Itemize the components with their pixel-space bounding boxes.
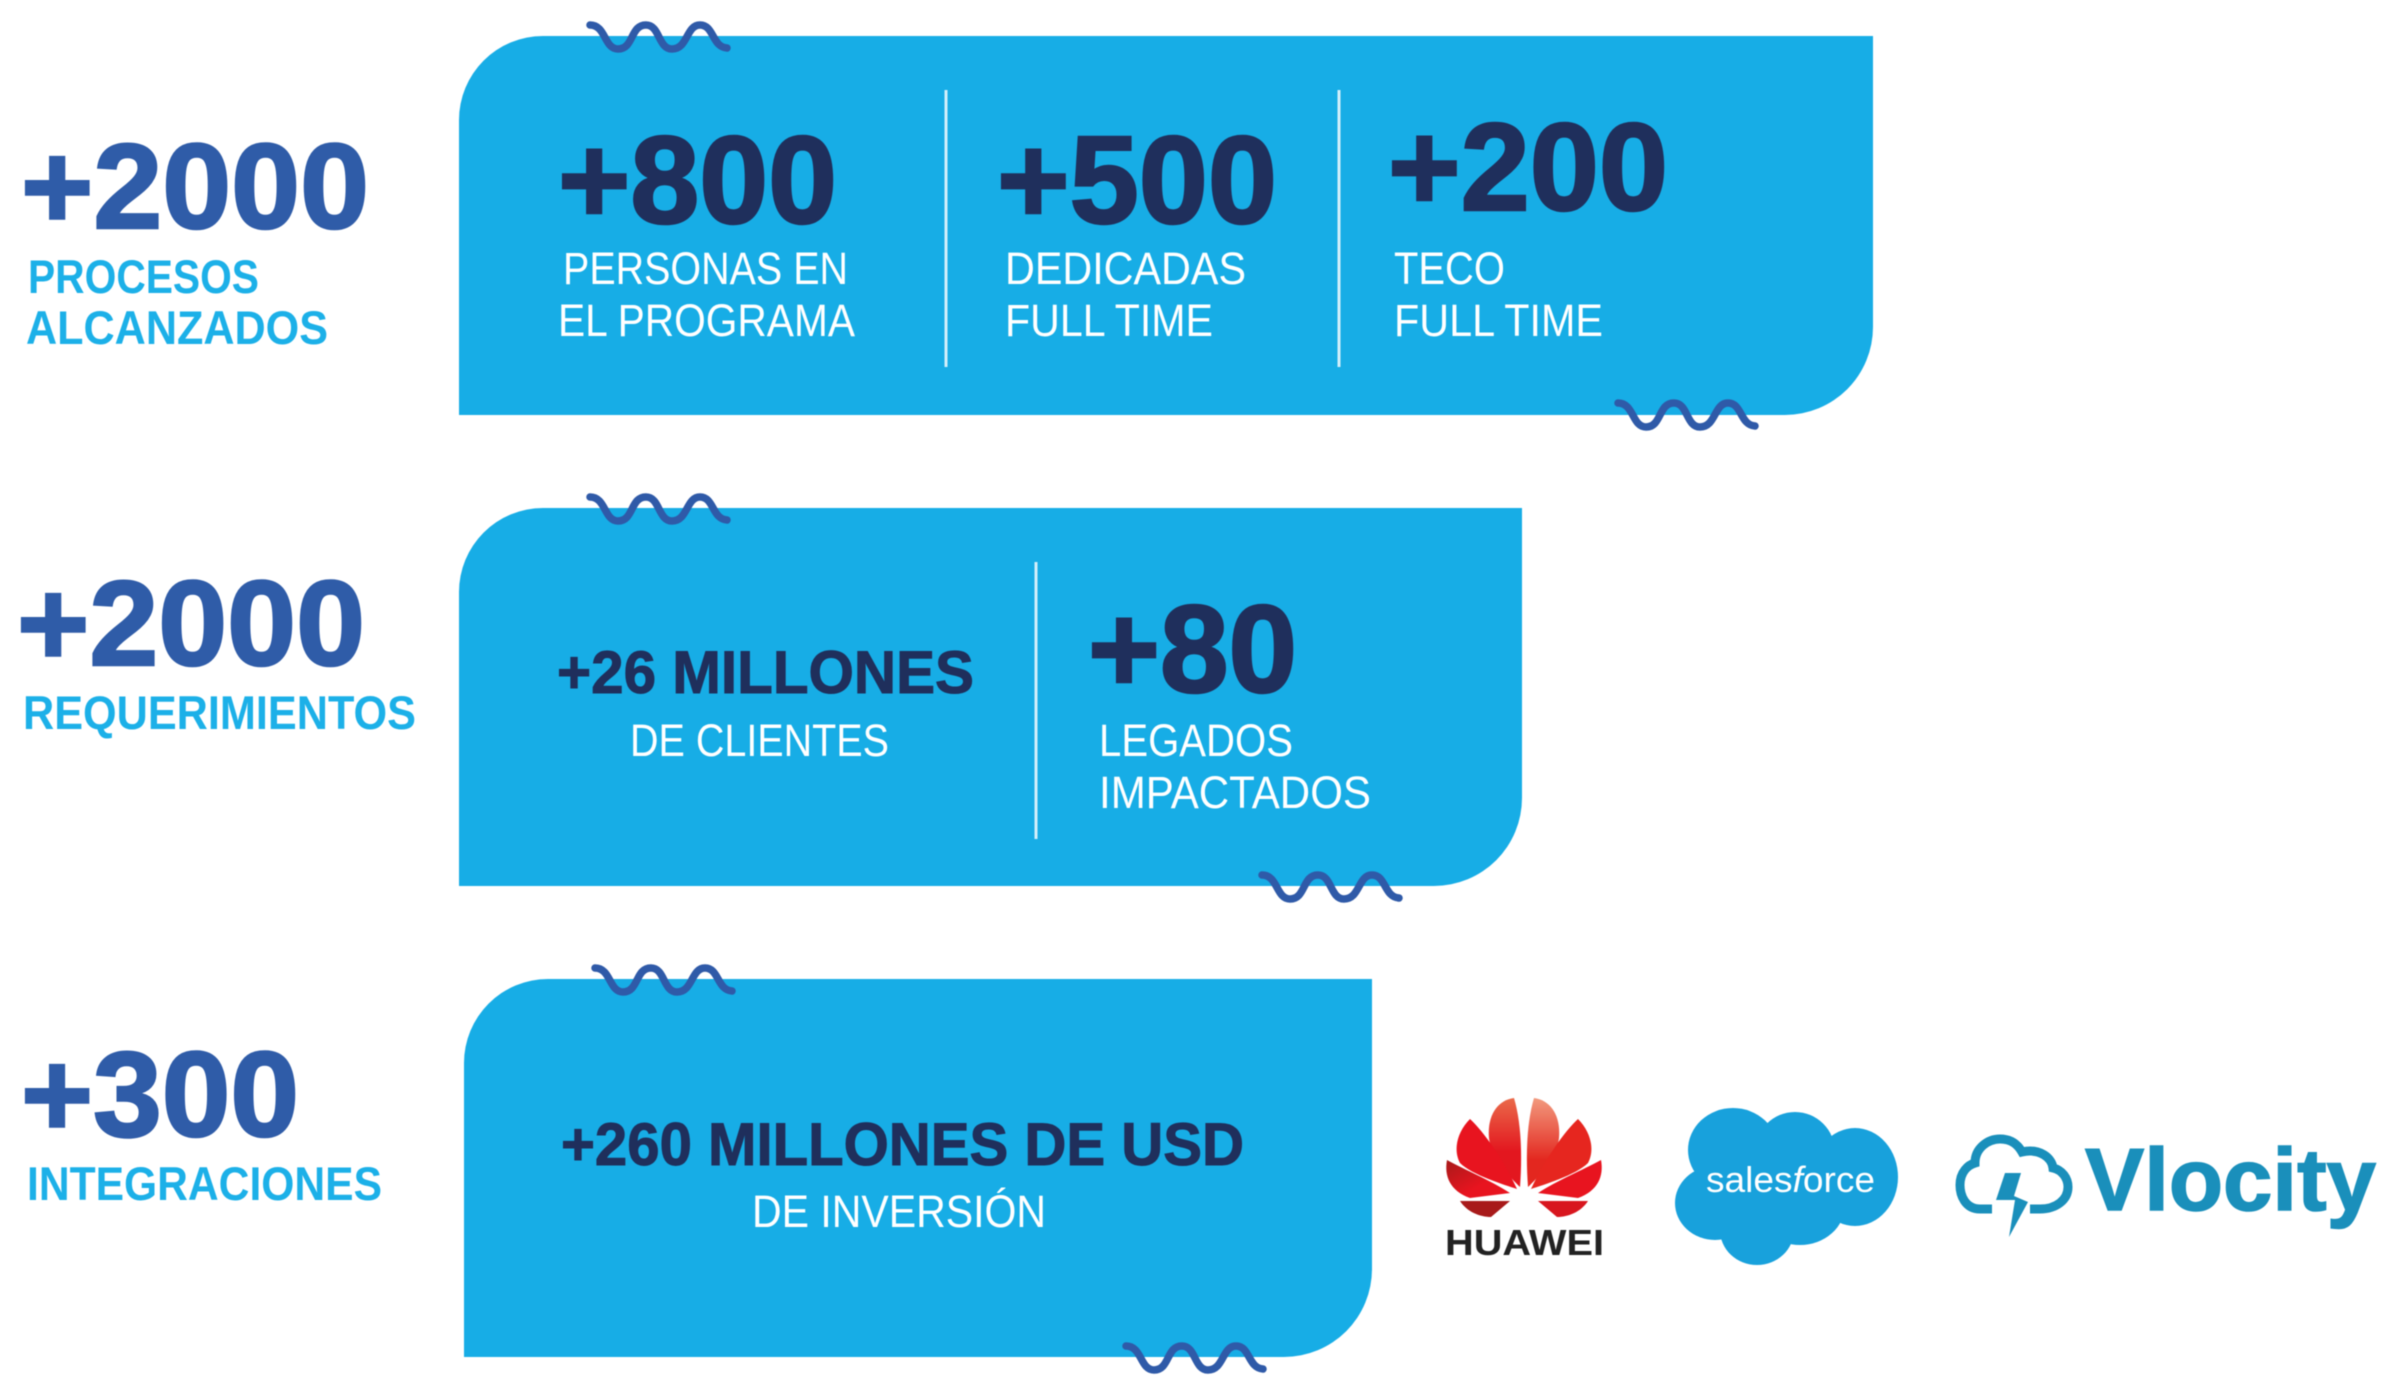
panel: personas en el programa [459, 25, 1873, 427]
label: dedicadas full time [1005, 243, 1246, 346]
stat: +300 integraciones: +300 [21, 1026, 299, 1162]
label: dedicadas full time: DEDICADAS [1005, 243, 1246, 294]
panel: inversion [464, 968, 1372, 1370]
figure: +26 millones: +26 MILLONES [557, 639, 974, 706]
label: personas en el programa: EL PROGRAMA [558, 295, 855, 346]
figure: +80: +80 [1088, 581, 1297, 719]
label: dedicadas full time: FULL TIME [1005, 295, 1213, 346]
figure: +260 millones de usd: +260 MILLONES DE USD [561, 1111, 1244, 1178]
wave bottom [1262, 875, 1399, 899]
stat: +2000 requerimientos: REQUERIMIENTOS [23, 686, 416, 739]
stat: +2000 requerimientos [17, 555, 416, 739]
label: teco full time [1394, 243, 1603, 346]
label: personas en el programa: PERSONAS EN [563, 243, 848, 294]
label: legados impactados: IMPACTADOS [1099, 767, 1371, 818]
label: de inversion: DE INVERSIÓN [752, 1186, 1046, 1237]
label: personas en el programa [558, 243, 855, 346]
figure: +200: +200 [1388, 99, 1668, 237]
label: teco full time: TECO [1394, 243, 1505, 294]
label: teco full time: FULL TIME [1394, 295, 1603, 346]
wave bottom [1126, 1346, 1263, 1370]
logo: vlocity: Vlocity [2085, 1130, 2376, 1229]
logo: salesforce: salesforce [1706, 1159, 1875, 1200]
wave bottom [1618, 403, 1755, 427]
label: de clientes: DE CLIENTES [630, 715, 889, 766]
stat: +2000 procesos alcanzados: ALCANZADOS [26, 301, 328, 354]
figure: +800: +800 [558, 112, 837, 250]
label: legados impactados: LEGADOS [1099, 715, 1293, 766]
stat: +2000 procesos alcanzados: PROCESOS [28, 250, 259, 303]
stat: +300 integraciones: INTEGRACIONES [27, 1157, 382, 1210]
wave top [590, 497, 727, 521]
panel: clientes y legados [459, 497, 1522, 899]
stat: +2000 procesos alcanzados [21, 118, 369, 354]
stat: +2000 procesos alcanzados: +2000 [21, 118, 369, 254]
stat: +300 integraciones [21, 1026, 382, 1210]
label: legados impactados [1099, 715, 1371, 818]
logo: huawei: HUAWEI [1445, 1222, 1604, 1263]
logo: salesforce [1675, 1108, 1898, 1265]
logo: huawei [1445, 1098, 1604, 1263]
stat: +2000 requerimientos: +2000 [17, 555, 365, 691]
wave top [595, 968, 732, 992]
logo: vlocity [1960, 1130, 2376, 1237]
figure: +500: +500 [997, 112, 1277, 250]
wave top [590, 25, 727, 49]
